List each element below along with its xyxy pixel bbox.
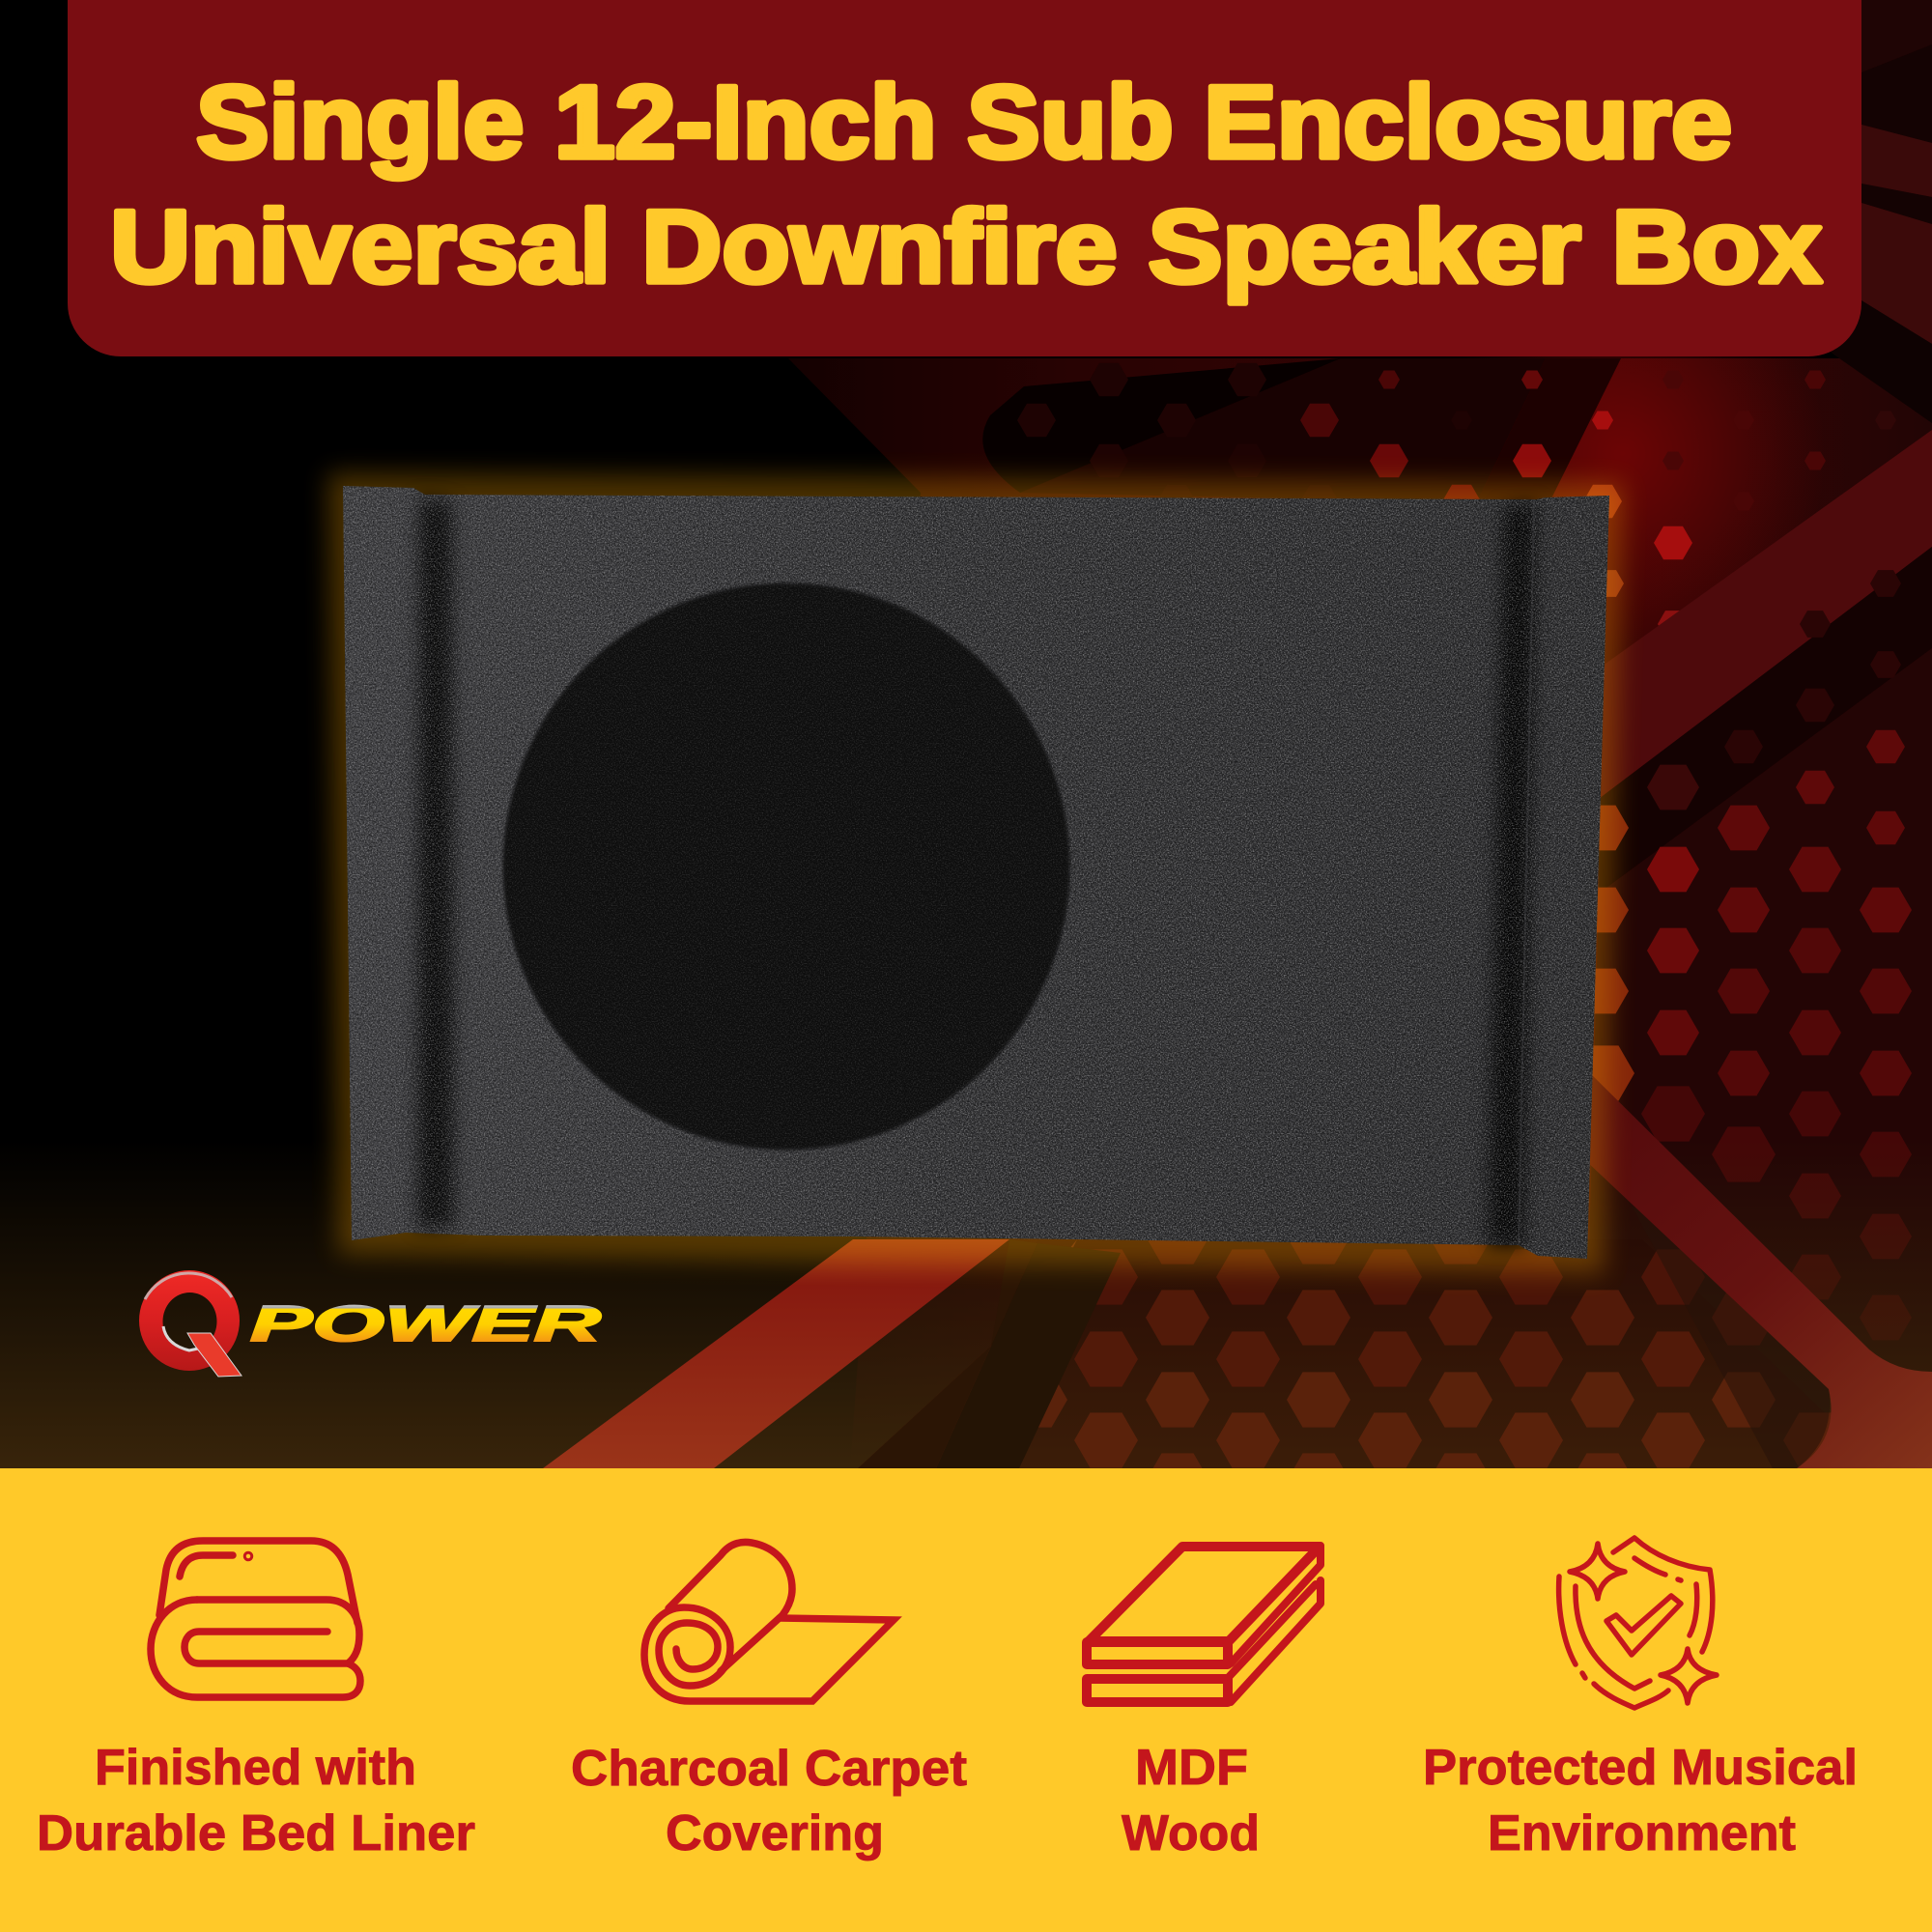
hexagon pattern lower field (936, 1208, 1847, 1509)
product glow (328, 473, 1623, 1273)
label: Finished with (95, 1740, 416, 1796)
speaker hole (503, 583, 1069, 1150)
feature: MDF wood (1087, 1546, 1321, 1861)
bottom haze (0, 1140, 1932, 1468)
label (37, 1740, 475, 1861)
diagonal bands lower centre (543, 1208, 1830, 1468)
label (571, 1741, 967, 1861)
feature: protected environment (1423, 1538, 1858, 1861)
icon: carpet roll (644, 1542, 894, 1701)
label: Durable Bed Liner (37, 1805, 475, 1861)
dark rounded band upper centre (982, 358, 1621, 502)
header banner (68, 0, 1861, 356)
label: Protected Musical (1423, 1740, 1858, 1796)
logo: Q Power (139, 1270, 602, 1377)
background: black to red scene (0, 0, 1932, 1509)
Q mark (139, 1270, 242, 1377)
texture (343, 486, 1609, 1259)
title (110, 64, 1822, 304)
edge highlight (1519, 499, 1534, 1245)
title: Universal Downfire Speaker Box (110, 188, 1822, 304)
icon: shield with check (1559, 1538, 1717, 1708)
label: Environment (1488, 1805, 1796, 1861)
feature: carpet (571, 1542, 967, 1861)
product photo: speaker box (343, 486, 1609, 1259)
label (1122, 1740, 1260, 1861)
POWER wordmark: POWER (250, 1296, 602, 1352)
dark rounded panel lower right (1584, 648, 1932, 1468)
icon: folded blanket (151, 1541, 360, 1697)
hexagon pattern right column (1571, 570, 1912, 1340)
dark diagonal band right (1599, 547, 1932, 894)
red diagonal band lower right (1584, 1067, 1932, 1468)
label: Wood (1122, 1805, 1260, 1861)
hexagon pattern upper strip (1017, 363, 1896, 638)
label (1423, 1740, 1858, 1861)
label: MDF (1135, 1740, 1248, 1796)
title: Single 12-Inch Sub Enclosure (196, 64, 1732, 180)
label: Covering (666, 1805, 884, 1861)
red diagonal band right (1599, 430, 1932, 799)
top-right corner facets (1813, 0, 1932, 423)
groove shadows (417, 497, 1536, 1246)
feature: bed liner (37, 1541, 475, 1861)
icon: stacked boards (1087, 1546, 1321, 1702)
label: Charcoal Carpet (571, 1741, 967, 1797)
features panel (0, 1468, 1932, 1932)
